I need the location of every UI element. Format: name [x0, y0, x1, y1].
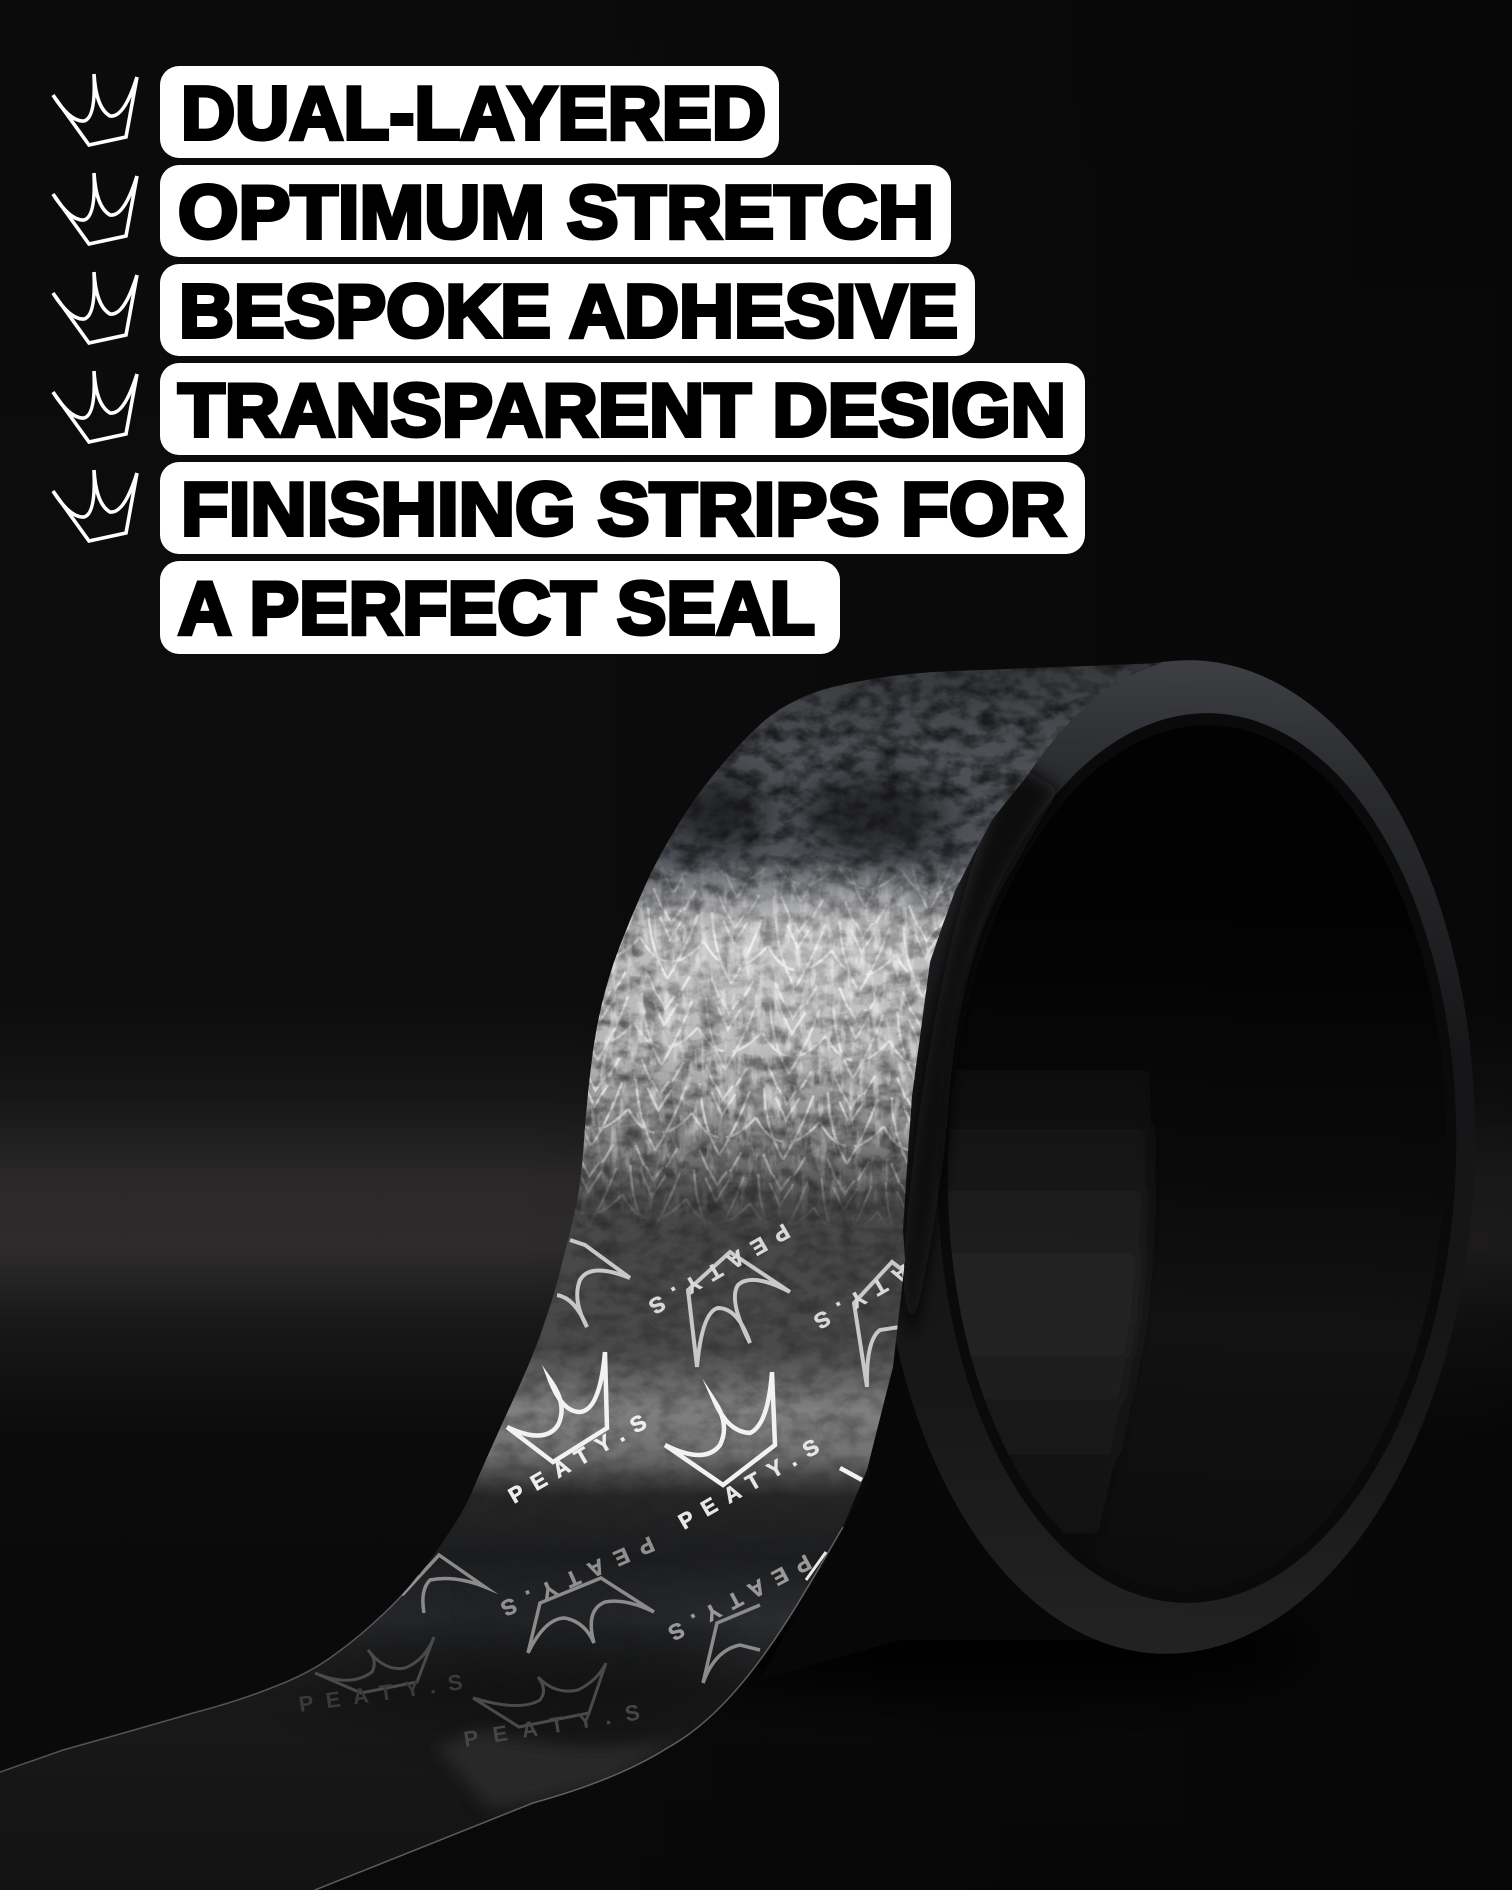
crown upright 3 — [840, 1468, 862, 1480]
wordmark dim inverted: PEATY.S — [497, 1531, 658, 1621]
tyre tread print — [575, 866, 964, 1220]
rim shadow left of hole — [904, 760, 1060, 1340]
item: transparent design — [53, 363, 1085, 455]
wordmark inverted right: PEATY.S — [810, 1234, 959, 1334]
item: finishing strips — [53, 462, 1085, 654]
tape edge highlights — [0, 1527, 843, 1890]
wordmark dim upright: PEATY.S — [297, 1669, 464, 1717]
mottled texture — [492, 663, 1160, 1484]
printed logos: wordmarks — [297, 1219, 959, 1752]
wordmark dim inverted right: PEATY.S — [664, 1550, 815, 1646]
label: finishing strips: FINISHING STRIPS FOR — [181, 467, 1066, 551]
crown upright 1 — [507, 1352, 607, 1462]
crown dim inverted E — [703, 1605, 760, 1683]
crown inverted centre — [688, 1252, 790, 1367]
roll rim — [862, 650, 1492, 1664]
wordmark upright 1: PEATY.S — [504, 1409, 651, 1508]
roll body under strip — [760, 1100, 1100, 1680]
icon: crown 1 — [53, 74, 137, 145]
wordmark upright 2: PEATY.S — [674, 1434, 823, 1534]
icon: crown 5 — [53, 470, 137, 541]
item: optimum stretch — [53, 165, 951, 257]
pill: finishing strips — [160, 462, 1085, 554]
item: bespoke adhesive — [53, 264, 975, 356]
crown dim inverted D — [528, 1578, 654, 1653]
crown dim upright G — [315, 1637, 434, 1693]
label: a perfect seal: A PERFECT SEAL — [178, 566, 815, 650]
label: optimum stretch: OPTIMUM STRETCH — [178, 170, 934, 254]
roll hole — [948, 726, 1418, 1534]
crown dim upright H — [473, 1663, 606, 1727]
pill: bespoke adhesive — [160, 264, 975, 356]
wordmark inverted centre: PEATY.S — [645, 1219, 794, 1319]
tape roll — [0, 650, 1492, 1890]
pill: a perfect seal — [160, 561, 840, 654]
printed logos: crowns — [315, 1240, 905, 1727]
shading — [666, 776, 766, 848]
icon: crown 3 — [53, 272, 137, 343]
icon: crown 2 — [53, 173, 137, 244]
label: dual-layered: DUAL-LAYERED — [181, 71, 766, 155]
rim groove — [923, 704, 1471, 1612]
pill: dual-layered — [160, 66, 779, 158]
pill: transparent design — [160, 363, 1085, 455]
icon: crown 4 — [53, 371, 137, 442]
crown inverted left — [557, 1240, 630, 1327]
tape band — [0, 650, 1200, 1890]
item: dual-layered — [53, 66, 779, 158]
clear patch — [444, 1730, 660, 1808]
crown inverted right — [854, 1262, 905, 1387]
wordmark dim upright right: PEATY.S — [462, 1699, 642, 1752]
roll shadow — [680, 1605, 1320, 1695]
label: bespoke adhesive: BESPOKE ADHESIVE — [179, 269, 958, 353]
bullet list — [53, 66, 1085, 654]
pill: optimum stretch — [160, 165, 951, 257]
crown dim inverted F — [402, 1555, 485, 1613]
label: transparent design: TRANSPARENT DESIGN — [178, 368, 1066, 452]
crown upright 2 — [665, 1372, 775, 1485]
